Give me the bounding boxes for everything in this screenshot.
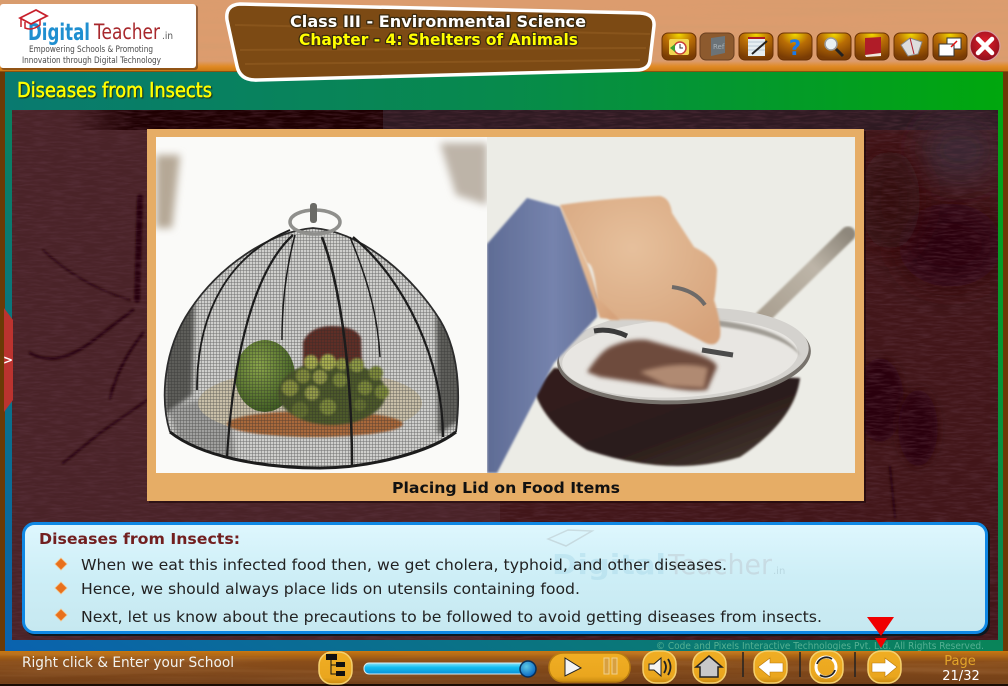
logo panel <box>0 4 198 70</box>
icon: help: ? <box>789 36 801 60</box>
bullet: cholera: When we eat this infected food then, we get cholera, typhoid, and other diseases. <box>81 556 727 574</box>
lid handle <box>594 287 733 355</box>
dome handle ring <box>290 203 340 234</box>
icon: close <box>970 31 1000 61</box>
bullet: precautions: Next, let us know about the precautions to be followed to avoid getting diseases from insects. <box>81 608 822 626</box>
dome ribs and rim <box>165 228 458 468</box>
logo wordmark: .in <box>162 31 173 42</box>
top wood header bar <box>0 0 1008 72</box>
grapes <box>278 354 389 425</box>
bullet: lids: Hence, we should always place lids on utensils containing food. <box>81 580 580 598</box>
text panel <box>24 524 990 636</box>
pan handle <box>762 234 848 318</box>
photo frame <box>147 129 866 503</box>
sleeve <box>487 198 597 473</box>
progress bar <box>364 661 536 677</box>
photo: hand lifting pan lid <box>487 137 855 473</box>
section heading band <box>5 72 1003 110</box>
logo tagline: Empowering Schools & Promoting <box>29 45 153 55</box>
icon: history clock <box>662 33 696 60</box>
content area: textured wall with mosquito shadow <box>12 110 1002 640</box>
pan body <box>534 368 800 466</box>
panel heading: Diseases from Insects: <box>39 530 240 548</box>
toolbar: top icons <box>662 31 1000 61</box>
hand <box>560 196 720 344</box>
mosquito legs <box>30 197 895 517</box>
icon: dictionary <box>855 33 889 60</box>
logo wordmark: Digital <box>28 20 90 46</box>
icon: reference book <box>700 33 734 60</box>
mesh <box>160 225 465 475</box>
copyright: © Code and Pixels Interactive Technologies Pvt. Ltd. All Rights Reserved. <box>656 641 984 652</box>
left slide-out tab <box>3 308 13 412</box>
icon: magnifier <box>817 33 851 60</box>
photo: food under mesh dome <box>156 137 487 475</box>
left slide-out tab: > <box>3 353 13 367</box>
red apple <box>303 326 362 368</box>
photo caption: Placing Lid on Food Items <box>392 479 620 497</box>
icon: reference book: Ref <box>713 43 725 51</box>
icon: home <box>693 651 726 683</box>
separators <box>743 652 855 677</box>
page label: Page <box>944 654 976 669</box>
icon: help <box>778 33 812 60</box>
icon: sound <box>643 651 676 683</box>
school prompt: Right click & Enter your School <box>22 655 234 671</box>
logo tagline <box>22 45 161 66</box>
lid <box>557 308 811 404</box>
play and pause control <box>549 653 630 682</box>
logo wordmark: Teacher <box>93 20 160 44</box>
plate <box>198 369 422 437</box>
icon: replay <box>810 651 843 683</box>
icon: open book <box>894 33 928 60</box>
icon: window resize <box>933 33 967 60</box>
arrow: red pointer to next button <box>867 617 894 648</box>
title: class: Class III - Environmental Science <box>290 12 586 31</box>
page number: 21/32 <box>942 669 980 684</box>
icon: graduation cap <box>20 10 47 29</box>
logo tagline: Innovation through Digital Technology <box>22 56 161 66</box>
icon: notepad <box>739 33 773 60</box>
watermark: Digital <box>552 548 666 581</box>
green apple <box>235 340 295 412</box>
dome interior <box>160 225 465 475</box>
icon: table of contents <box>319 652 352 684</box>
logo wordmark <box>28 20 173 46</box>
title plaque <box>227 4 654 80</box>
watermark: .in <box>773 566 785 577</box>
icon: previous <box>754 651 787 683</box>
watermark <box>548 530 785 581</box>
bottom control bar <box>0 651 1008 686</box>
watermark: Teacher <box>667 548 772 581</box>
icon: next <box>868 651 901 683</box>
title: chapter: Chapter - 4: Shelters of Animals <box>299 30 578 49</box>
hand reflection <box>587 340 717 391</box>
heading: Diseases from Insects: Diseases from Insects <box>17 78 212 102</box>
